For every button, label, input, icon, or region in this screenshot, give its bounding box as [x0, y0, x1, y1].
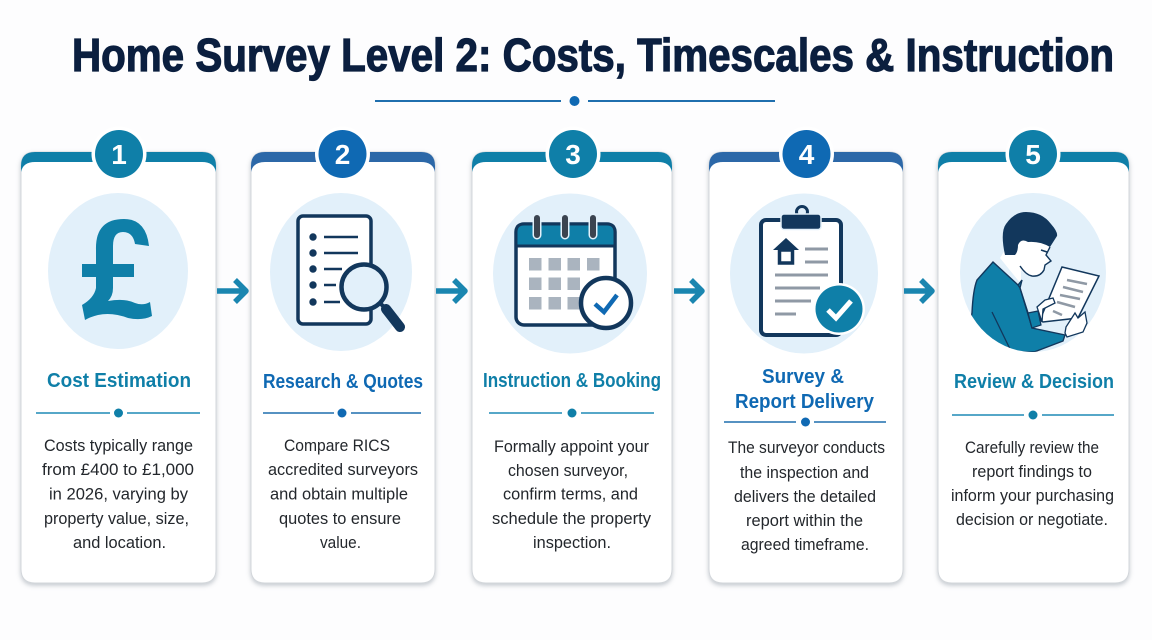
body text [728, 438, 885, 554]
icon: clipboard with house and check [730, 194, 878, 354]
body text [42, 436, 194, 552]
panel: step 4 survey and report delivery [709, 126, 903, 583]
heading: survey and report delivery [735, 365, 875, 413]
body text: report within the [746, 511, 863, 530]
report sheet [1040, 267, 1099, 322]
arrow 2 to 3 [436, 280, 465, 302]
icon: person reading report [960, 193, 1106, 352]
body text: delivers the detailed [734, 487, 876, 506]
body text [492, 437, 651, 552]
body text: value. [320, 533, 361, 552]
title divider [375, 96, 775, 106]
hair [1003, 212, 1057, 255]
body text: agreed timeframe. [741, 535, 869, 554]
heading: survey and report delivery: Survey & [762, 365, 844, 388]
heading divider [724, 418, 886, 426]
body text: report findings to [972, 462, 1092, 481]
hands [1037, 298, 1055, 322]
step number 2: 2 [335, 139, 350, 170]
step number 5 [1006, 126, 1060, 182]
arrow 3 to 4 [674, 280, 702, 302]
body text: Compare RICS [284, 436, 390, 455]
arrow 1 to 2 [217, 280, 246, 302]
step number 3 [546, 126, 600, 182]
body text: accredited surveyors [268, 460, 418, 479]
step number 1 [92, 126, 146, 182]
step number 1: 1 [111, 139, 127, 170]
arrow 4 to 5 [904, 280, 932, 302]
body text: decision or negotiate. [956, 510, 1108, 529]
step number 4 [779, 126, 834, 182]
body text [268, 436, 418, 552]
body text: in 2026, varying by [49, 484, 188, 504]
body text: inspection. [533, 533, 611, 552]
icon: checklist and magnifier [270, 193, 412, 351]
heading divider [952, 410, 1114, 420]
body text: Formally appoint your [494, 437, 649, 456]
body text: and location. [73, 533, 166, 552]
body text: chosen surveyor, [508, 461, 628, 480]
heading divider [36, 408, 200, 418]
heading: instruction and booking: Instruction & Booking [483, 369, 661, 392]
body text: The surveyor conducts [728, 438, 885, 457]
heading: research and quotes: Research & Quotes [263, 370, 423, 393]
icon: pound sign [48, 193, 188, 349]
step number 3: 3 [565, 139, 581, 170]
heading: review and decision: Review & Decision [954, 370, 1114, 393]
panel: step 1 cost estimation [21, 126, 216, 583]
body text: Costs typically range [44, 436, 193, 455]
body text: schedule the property [492, 509, 651, 528]
step number 2 [315, 126, 370, 182]
heading: survey and report delivery: Report Delivery [735, 390, 875, 413]
body text: property value, size, [44, 509, 189, 528]
panel: step 3 instruction and booking [472, 126, 672, 583]
panel: step 5 review and decision [938, 126, 1129, 583]
body text: and obtain multiple [270, 484, 408, 504]
icon: calendar with check [493, 194, 647, 354]
step number 5: 5 [1025, 139, 1041, 170]
body text: from £400 to £1,000 [42, 460, 194, 479]
body text: the inspection and [740, 463, 869, 482]
body text: inform your purchasing [951, 486, 1114, 505]
body text: confirm terms, and [503, 484, 638, 504]
heading: cost estimation: Cost Estimation [47, 369, 191, 392]
body text: quotes to ensure [279, 509, 401, 528]
heading divider [263, 408, 421, 418]
body text [951, 438, 1114, 529]
step number 4: 4 [799, 139, 815, 170]
body text: Carefully review the [965, 438, 1099, 457]
heading divider [489, 408, 654, 418]
panel: step 2 research and quotes [251, 126, 435, 583]
